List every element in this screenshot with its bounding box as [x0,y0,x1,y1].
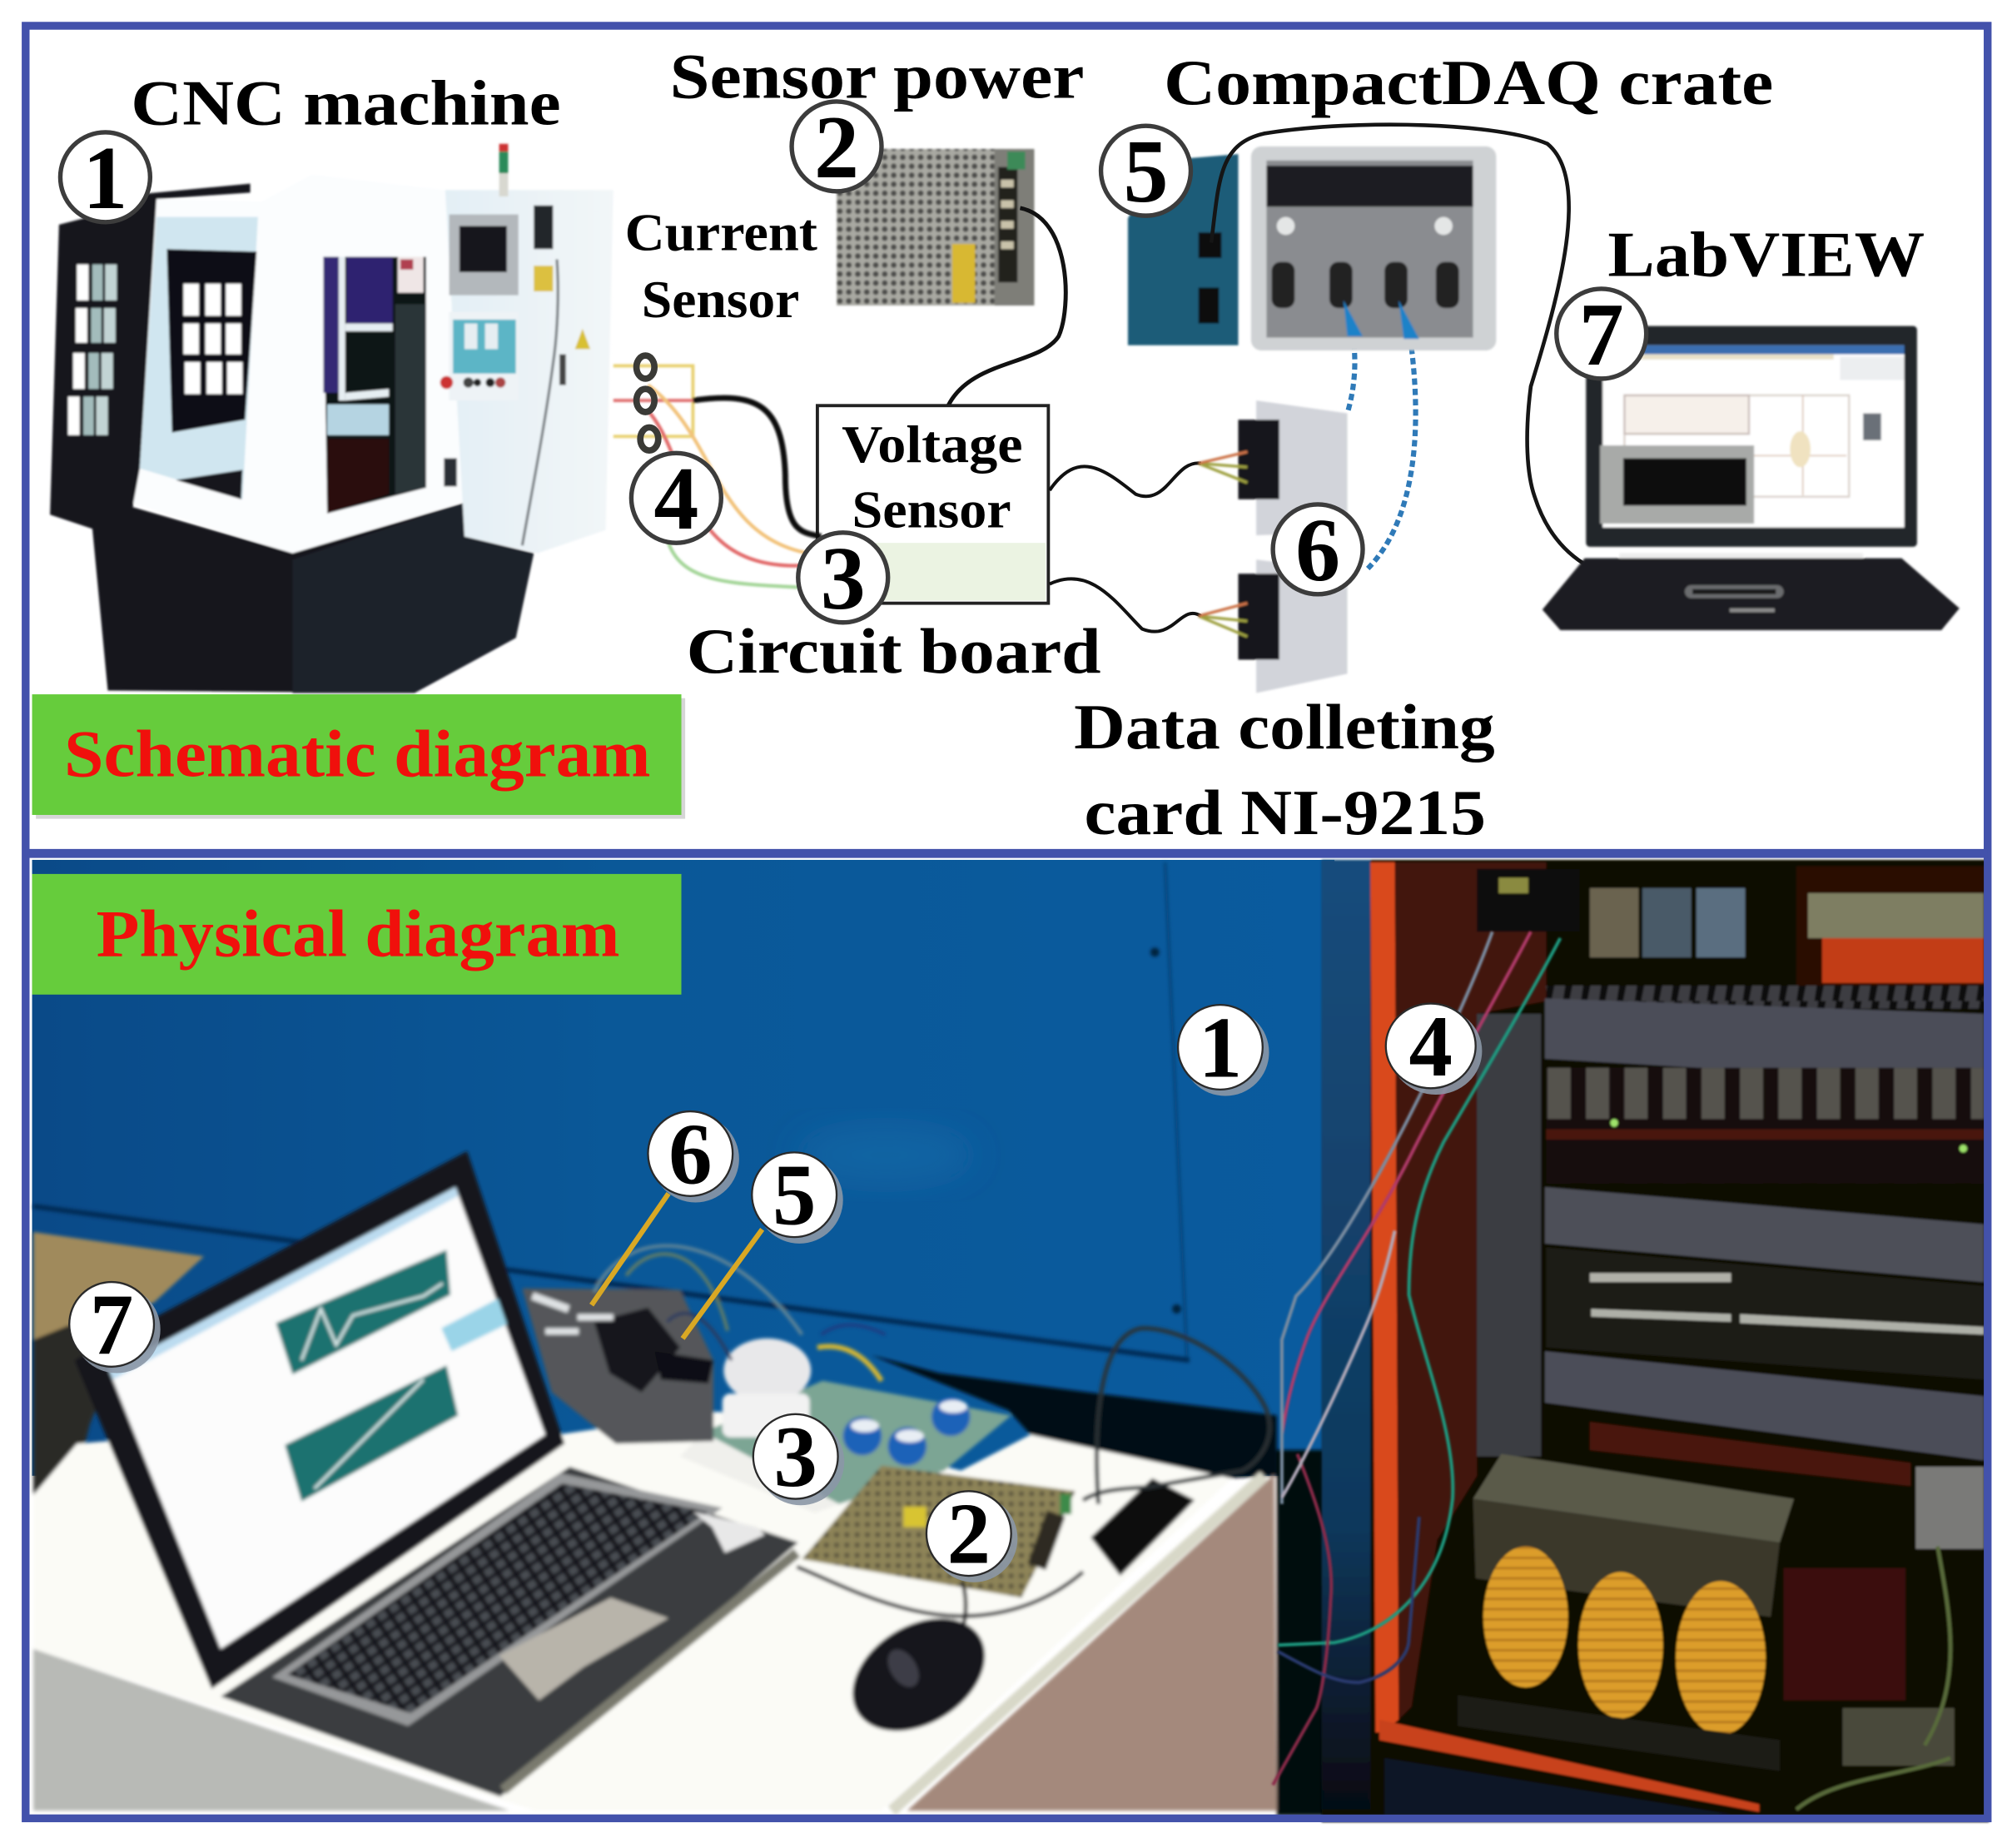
green label: Physical diagram: Physical diagram [97,898,620,971]
markers: schematic numbers: 6 [1295,501,1340,600]
heading: CompactDAQ crate: CompactDAQ crate [1164,47,1773,118]
machine rear windows [68,265,117,435]
markers: schematic numbers: 3 [821,529,866,628]
wires: current sensor leads [614,365,822,588]
panel: physical diagram photo [32,860,1989,1822]
heading: Circuit board: Circuit board [687,615,1101,687]
label: Current Sensor [625,204,817,329]
data acquisition cluster [522,1289,713,1443]
transformer [1473,1454,1794,1542]
label: Voltage Sensor: Voltage [842,415,1023,474]
markers: schematic numbers: 5 [1124,122,1168,221]
markers: schematic numbers: 1 [82,129,127,228]
markers: physical numbers: 6 [668,1105,713,1202]
yellow pointers [592,1194,763,1339]
label: Voltage Sensor: Sensor [852,481,1011,539]
markers: physical numbers: 7 [90,1276,133,1373]
table edge strip [892,1476,1264,1811]
machine door windows [183,284,242,394]
control cabinet [1322,860,1989,1822]
table top [33,1412,1232,1811]
wires: voltage sensor to data cards [1050,463,1201,632]
markers: schematic numbers [60,98,1647,628]
power supply [802,1465,1076,1597]
teal board [703,1381,1011,1504]
box: voltage sensor and circuit board [817,405,1048,604]
icon: current sensor clamps [637,355,658,450]
laptop screen [74,1151,564,1689]
table side [907,1474,1277,1811]
laptop base [221,1467,798,1796]
white strip under board [680,1432,839,1513]
black socket [1090,1478,1195,1576]
heading: Data colleting card NI-9215: Data colleting [1074,691,1495,763]
heading: Data colleting card NI-9215: card NI-9215 [1085,777,1486,848]
label: Voltage Sensor [842,415,1023,539]
photo: sensor power supply [837,149,1034,306]
cluttered photo scene [33,862,1379,1816]
markers: physical numbers: 3 [773,1408,817,1505]
markers: schematic numbers: 7 [1579,286,1624,385]
markers: physical numbers [69,998,1482,1582]
photo: CNC machine [50,144,614,693]
heading: LabVIEW: LabVIEW [1607,219,1925,291]
green label: Physical diagram [32,874,682,995]
heading: Data colleting card NI-9215 [1074,691,1495,848]
blue machine wall [32,860,1334,1476]
white cylinder [723,1339,811,1403]
markers: physical numbers: 5 [773,1147,816,1244]
machine control panel [450,215,519,296]
markers: schematic numbers: 4 [653,450,698,549]
green label: Schematic diagram [32,694,685,819]
panel: schematic diagram [32,40,1960,848]
computer mouse [832,1595,1006,1754]
blue capacitors [843,1398,970,1465]
wire: crate to laptop [1211,125,1583,564]
photo: NI-9215 data cards [1199,400,1348,693]
label: Current Sensor: Current [625,204,817,262]
dark gap beside table [1277,1450,1379,1816]
markers: physical numbers: 1 [1199,999,1242,1095]
arrows: dotted links to crate slots [1348,343,1416,569]
label: Current Sensor: Sensor [642,271,799,329]
wires: current sensor leads in cabinet [1273,931,1560,1785]
heading: Sensor power: Sensor power [670,40,1085,112]
heading: CNC machine: CNC machine [131,67,561,139]
markers: physical numbers: 2 [947,1486,991,1582]
photo: CompactDAQ crate [1128,147,1496,350]
green label: Schematic diagram: Schematic diagram [64,718,651,792]
markers: physical numbers: 4 [1409,998,1453,1095]
markers: schematic numbers: 2 [814,98,859,197]
wire: power to voltage sensor [947,208,1066,408]
photo: LabVIEW laptop [1543,326,1960,630]
